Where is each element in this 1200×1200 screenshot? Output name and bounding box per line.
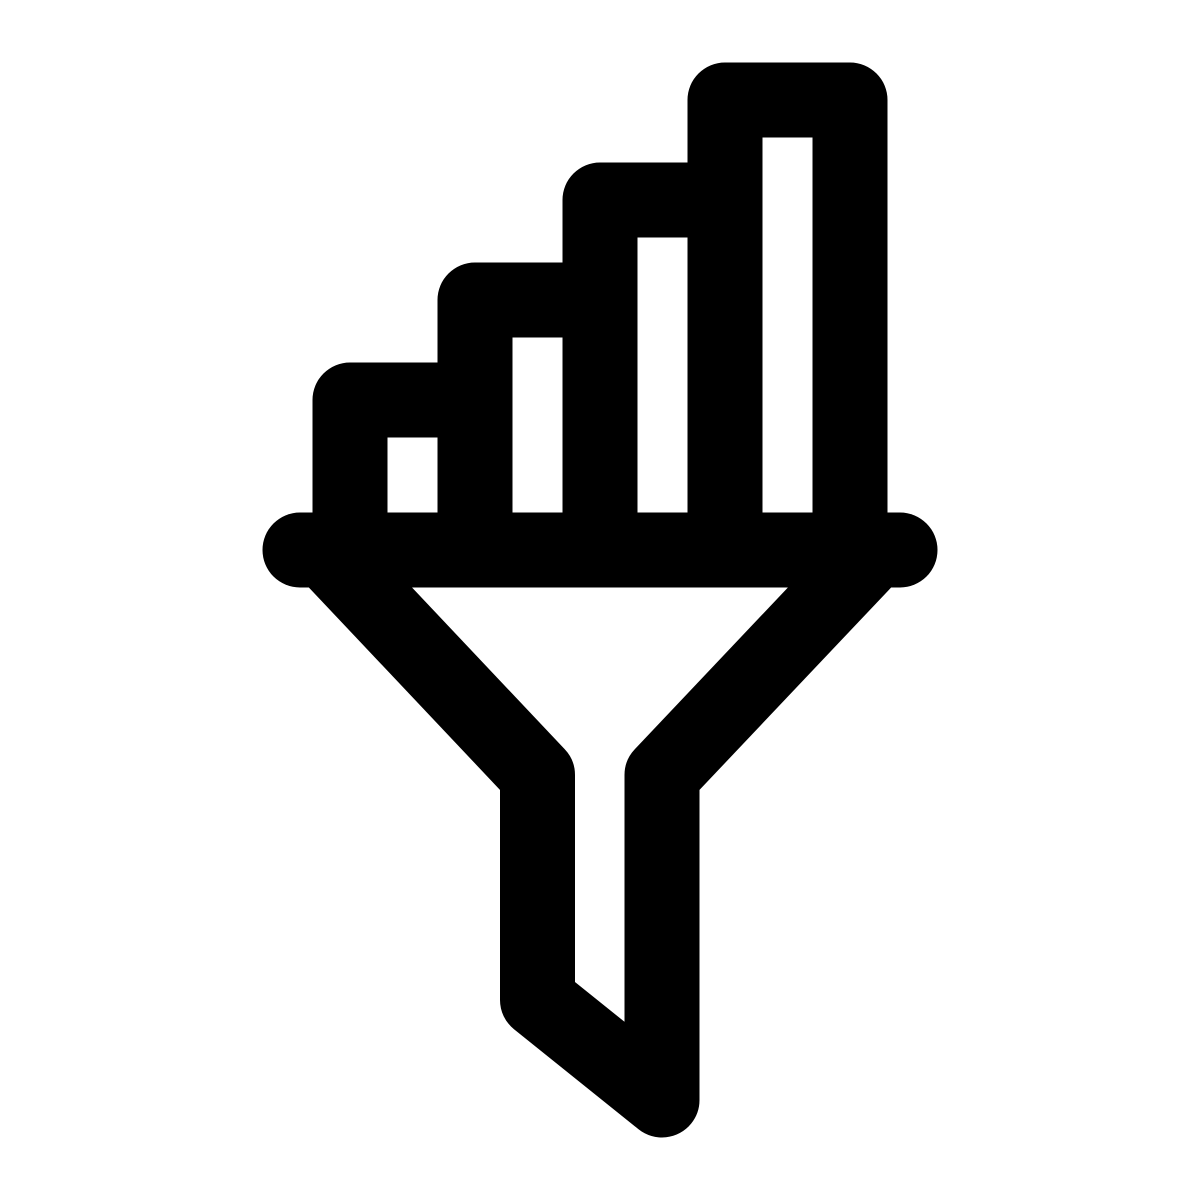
icon: bars (350, 100, 850, 550)
icon: funnel (300, 550, 900, 1100)
